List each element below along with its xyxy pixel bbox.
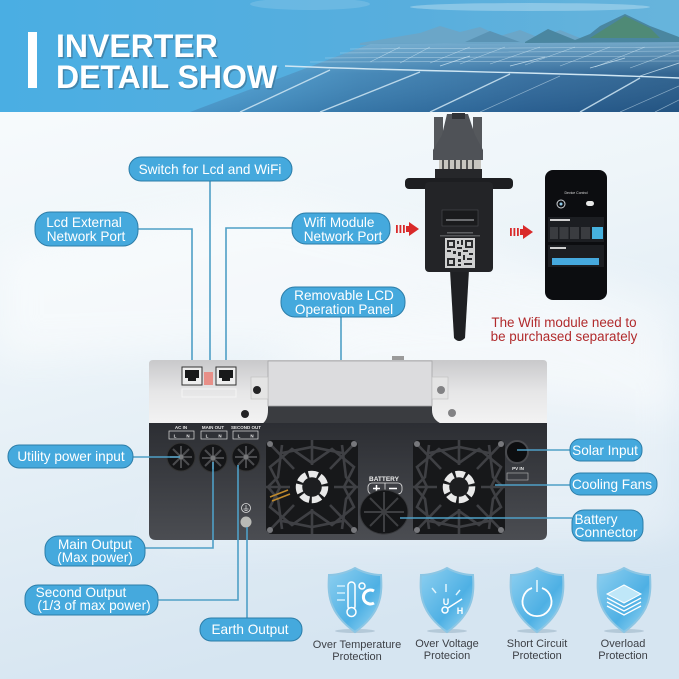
power limit slider card — [548, 245, 604, 267]
callout: Main Output — [45, 536, 145, 566]
callout: Cooling Fans: Cooling Fans — [572, 477, 652, 492]
battery label — [368, 476, 402, 494]
shield: over temperature — [329, 568, 381, 633]
module print — [447, 232, 473, 234]
arrow: module to phone — [510, 225, 533, 239]
faint port labels — [182, 389, 236, 397]
wifi module note: The Wifi module need to — [491, 315, 637, 330]
callout: Lcd External Network Port: Network Port — [47, 229, 126, 244]
protection labels: Protection — [512, 650, 562, 662]
wifi network port — [216, 367, 236, 385]
protection labels: Over Temperature — [313, 639, 401, 651]
inverter unit — [149, 356, 547, 540]
wifi module note — [491, 315, 638, 344]
AC terminal labels: SECOND OUT — [231, 425, 261, 430]
protection labels: Protection — [598, 650, 648, 662]
AC terminal labels: N — [186, 434, 190, 438]
callout: Removable LCD Operation Panel: Removable LCD — [294, 288, 394, 303]
callout: Utility power input — [8, 445, 133, 468]
title: DETAIL SHOW — [56, 59, 278, 95]
main output gland — [199, 444, 227, 472]
switch — [204, 372, 213, 385]
protection icons — [313, 568, 650, 663]
header banner — [0, 0, 679, 112]
AC terminal labels — [169, 425, 261, 439]
module display — [442, 210, 478, 226]
callout: Solar Input — [570, 439, 642, 461]
DB9 connector — [433, 113, 483, 179]
callout: Second Output: Second Output — [36, 585, 127, 600]
callout: Main Output: (Max power) — [57, 550, 133, 565]
callout: Earth Output — [200, 618, 302, 641]
mountains — [360, 14, 679, 45]
protection labels: Protection — [332, 651, 382, 663]
callout: Utility power input: Utility power input — [17, 449, 125, 464]
AC input gland — [167, 443, 195, 471]
LCD network port — [182, 367, 202, 385]
wifi module — [405, 113, 513, 341]
lower leader lines — [133, 450, 572, 618]
title: INVERTER — [58, 30, 219, 66]
title accent bar — [28, 32, 37, 88]
battery label: BATTERY — [369, 476, 400, 483]
PV input: PV IN — [512, 466, 524, 471]
wifi module note: be purchased separately — [491, 329, 638, 344]
module body — [425, 182, 493, 272]
AC terminal labels: N — [250, 434, 254, 438]
phone app — [545, 170, 607, 300]
PV input — [506, 441, 528, 480]
callout: Battery Connector — [572, 510, 643, 541]
protection labels: Overload — [601, 638, 645, 650]
output power setting card — [548, 217, 604, 242]
callout: Earth Output: Earth Output — [211, 622, 289, 637]
callout: Main Output: Main Output — [58, 537, 132, 552]
title: DETAIL SHOW — [58, 60, 279, 96]
callout: Battery Connector: Battery — [574, 512, 618, 527]
second output gland — [232, 443, 260, 471]
fan wires — [270, 490, 290, 501]
left cooling fan — [266, 440, 358, 534]
callout: Second Output: (1/3 of max power) — [37, 598, 151, 613]
shield: over voltage: H — [457, 606, 463, 616]
shield: short circuit — [511, 568, 563, 633]
callout: Wifi Module Network Port — [292, 213, 390, 244]
phone app: Device Control — [565, 191, 588, 195]
callout: Lcd External Network Port — [35, 212, 138, 246]
protection labels: Short Circuit — [507, 638, 567, 650]
mounting flange — [405, 178, 513, 189]
AC terminal labels: AC IN — [175, 425, 187, 430]
callout: Wifi Module Network Port: Wifi Module — [303, 215, 375, 230]
callout: Switch for Lcd and WiFi: Switch for Lcd and WiFi — [139, 162, 281, 177]
callout: Lcd External Network Port: Lcd External — [46, 215, 122, 230]
removable LCD panel — [268, 361, 432, 406]
solar panel field — [190, 42, 679, 112]
title: INVERTER — [56, 28, 218, 64]
dark notch behind panel — [262, 405, 442, 424]
top knob — [392, 356, 404, 360]
AC terminal labels: N — [218, 434, 222, 438]
earth terminal — [240, 504, 252, 528]
AC terminal labels: MAIN OUT — [202, 425, 224, 430]
protection labels — [313, 638, 648, 663]
panel clips — [241, 377, 456, 418]
callout: Removable LCD Operation Panel — [281, 287, 405, 317]
silver top case — [149, 360, 547, 424]
protection labels: Protecion — [424, 650, 470, 662]
callout: Wifi Module Network Port: Network Port — [304, 229, 383, 244]
protection labels: Over Voltage — [415, 638, 479, 650]
callout: Cooling Fans — [570, 473, 657, 495]
QR code — [445, 238, 475, 268]
callout: Solar Input: Solar Input — [572, 443, 638, 458]
callout: Removable LCD Operation Panel: Operation Panel — [295, 302, 393, 317]
callout: Battery Connector: Connector — [575, 525, 638, 540]
shield: overload — [598, 568, 650, 633]
shield: over voltage: U — [443, 597, 449, 607]
AC terminal labels: L — [174, 434, 177, 438]
AC terminal labels: L — [206, 434, 209, 438]
antenna — [450, 270, 469, 341]
title — [56, 28, 279, 96]
callout: Second Output — [25, 585, 158, 615]
right cooling fan — [413, 440, 505, 534]
dark body — [149, 423, 547, 540]
arrow: port to module — [396, 222, 419, 236]
AC terminal labels: L — [238, 434, 241, 438]
leader lines — [138, 181, 341, 382]
battery connector — [360, 490, 408, 534]
shield: over voltage — [421, 568, 473, 633]
callout: Switch for Lcd and WiFi — [129, 157, 292, 181]
